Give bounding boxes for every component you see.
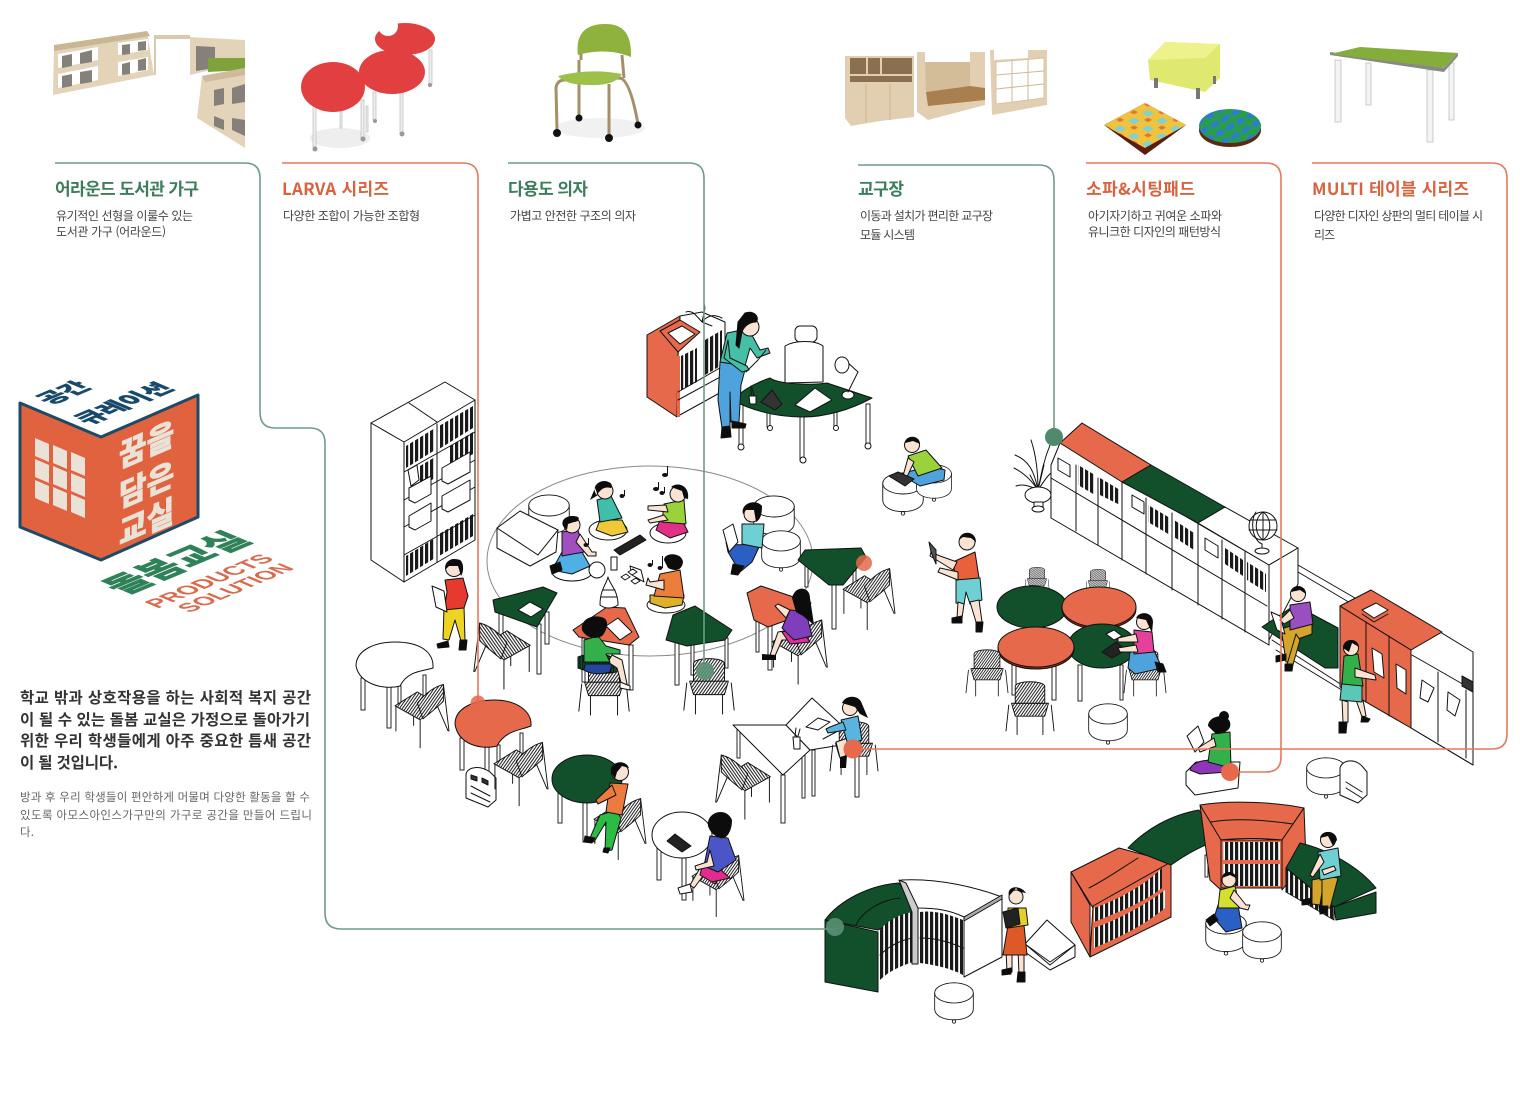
connector line: MULTI: [853, 163, 1507, 749]
person: boy reading with teal shirt: [723, 502, 764, 575]
white kidney table: [356, 642, 433, 728]
chair right of green table: [843, 569, 895, 630]
white tri tables: [733, 698, 860, 823]
chair at green table: [684, 659, 734, 714]
panel: LARVA caption: LARVA 시리즈: [282, 175, 389, 200]
person: seated girl with green shirt: [648, 484, 688, 543]
orange table right of rug: [747, 586, 811, 670]
floor title: 돌봄교실: 돌봄교실: [84, 524, 263, 599]
chair by green table: [594, 799, 646, 860]
title text: 공간 큐레이션: 큐레이션: [62, 377, 183, 428]
person: child in green shirt at orange table: [582, 616, 630, 690]
panel: sofa caption: [1086, 175, 1222, 240]
chair front of cluster: [1006, 682, 1054, 735]
around library unit: green and white: [825, 880, 1002, 992]
product photo: sofa and seating pads: [1104, 42, 1261, 155]
title text: 꿈을 담은 교실: 꿈을: [119, 409, 174, 478]
panel: sofa caption: 소파&시팅패드: [1086, 175, 1195, 200]
person: seated boy with teal shirt: [1302, 832, 1341, 914]
green seat right: [1286, 843, 1376, 920]
icon: xylophone and toys: [589, 535, 646, 608]
cabinet orange top: [1060, 423, 1151, 482]
person: girl with blue shirt at tri table: [826, 697, 868, 768]
long storage cabinet: [1051, 423, 1298, 645]
green table on rug right: [666, 606, 732, 685]
intro text block: 방과 후 우리 학생들이 편안하게 머물며 다양한 활동을 할 수: [20, 789, 310, 805]
icon: plant on cabinet: [686, 304, 722, 326]
green round table: [552, 755, 622, 842]
cube front faces: [20, 395, 198, 560]
icon: desk lamp: [835, 357, 858, 399]
white round table: [652, 812, 712, 900]
product photo: teaching cabinets: [845, 50, 1047, 126]
person: teacher: [718, 312, 770, 438]
cabinet green top: [1122, 465, 1225, 523]
panel: cabinet caption: 교구장: [858, 175, 904, 200]
panel: MULTI caption: MULTI 테이블 시리즈: [1312, 175, 1469, 200]
product photo: MULTI table: [1330, 47, 1458, 142]
teacher storage cabinet: [647, 304, 725, 417]
panel: around library caption: 도서관 가구 (어라운드): [56, 223, 166, 240]
bench and orange cabinet: [1262, 565, 1473, 765]
person: boy with orange shirt and toy plane: [929, 533, 983, 632]
panel: cabinet caption: 이동과 설치가 편리한 교구장: [860, 207, 993, 224]
panel: MULTI caption: [1312, 175, 1483, 243]
chair behind girl: [830, 722, 878, 775]
icon: book on table: [518, 602, 543, 617]
title text: 꿈을 담은 교실: [119, 409, 174, 555]
product photo: LARVA tables: [301, 16, 435, 152]
around library unit: orange top: [1200, 802, 1306, 890]
panel: isometric cube title: [20, 362, 198, 560]
teacher desk and chair: [732, 326, 872, 463]
floor subtitle: products solution: PRODUCTS: [138, 551, 280, 611]
intro text block: 있도록 아모스아인스가구만의 가구로 공간을 만들어 드립니: [20, 807, 312, 823]
panel: around library caption: [55, 175, 199, 240]
chair by white round table: [692, 856, 744, 917]
title text: 공간 큐레이션: 공간: [25, 376, 100, 408]
chair at orange table: [773, 620, 827, 684]
stool and backpack right: [1307, 758, 1367, 803]
stool by cluster: [1089, 704, 1127, 744]
person: seated girl with teal shirt: [589, 481, 628, 540]
person: girl with blue shirt and pink shorts: [678, 812, 736, 894]
rug circle: [487, 466, 813, 656]
icon: globe: [1249, 512, 1277, 554]
chair by tri table: [716, 755, 770, 819]
person: girl with pink shirt: [1118, 613, 1166, 674]
panel: sofa caption: 유니크한 디자인의 패턴방식: [1088, 223, 1221, 240]
intro text block: 이 될 수 있는 돌봄 교실은 가정으로 돌아가기: [20, 708, 310, 730]
person: boy with green shirt at orange cabinet: [1339, 640, 1376, 733]
chair left of cluster: [966, 650, 1008, 696]
connector line: around library: [55, 163, 835, 929]
person: kneeling boy with purple shirt: [550, 516, 596, 581]
square stool bottom: [1025, 920, 1075, 970]
chair by orange table: [494, 742, 548, 806]
tall bookcase: [371, 382, 475, 582]
cabinet white top: [1198, 507, 1298, 565]
icon: music notes: [584, 466, 668, 570]
person: seated girl with orange shirt: [646, 554, 685, 613]
cube window icon: [35, 438, 85, 518]
marker dots: [470, 428, 1239, 936]
panel: chair caption: 가볍고 안전한 구조의 의자: [510, 207, 636, 224]
icon: backpack: [466, 768, 496, 807]
around library unit: orange curve: [1071, 848, 1171, 957]
connector line: LARVA: [282, 163, 478, 703]
icon: desk calendar: [761, 390, 782, 410]
person: kneeling boy with lime shirt: [1206, 872, 1250, 932]
orange kidney table: [455, 700, 531, 785]
person: girl with orange skirt: [1002, 887, 1028, 982]
icon: keyboard: [667, 834, 691, 852]
person: boy with orange shirt and green trousers: [584, 762, 629, 853]
floor subtitle: products solution: SOLUTION: [171, 561, 300, 615]
product photo: multipurpose chair: [553, 24, 645, 142]
connector line: cabinet: [858, 165, 1054, 437]
stool and boy with lime shirt: [883, 437, 951, 515]
orange table on rug: [573, 607, 639, 690]
chair under orange table: [578, 654, 629, 715]
panel: chair caption: [508, 175, 636, 224]
potted plant: [1014, 440, 1056, 512]
square stool and girl with green shirt: [1186, 711, 1240, 795]
around library unit: green arc: [1128, 810, 1219, 865]
chair by green table: [474, 623, 530, 689]
panel: sofa caption: 아기자기하고 귀여운 소파와: [1088, 207, 1222, 224]
panel: chair caption: 다용도 의자: [508, 175, 588, 200]
title text: 꿈을 담은 교실: 교실: [119, 486, 174, 555]
title text: 꿈을 담은 교실: 담은: [119, 449, 174, 518]
stool bottom: [935, 983, 973, 1023]
panel: around library caption: 유기적인 선형을 이룰수 있는: [56, 207, 193, 224]
cube top face: [20, 362, 198, 437]
panel: LARVA caption: [282, 175, 420, 224]
person: boy with purple shirt on bench: [1271, 586, 1313, 671]
product photo: around library furniture: [53, 31, 245, 148]
green table right of rug: [798, 548, 866, 629]
connector line: sofa: [1086, 163, 1281, 772]
icon: pen cup: [749, 396, 756, 404]
icon: open book: [795, 388, 832, 412]
panel: around library caption: 어라운드 도서관 가구: [55, 175, 199, 200]
white soft seats on rug: [497, 495, 800, 571]
panel: MULTI caption: 리즈: [1314, 226, 1335, 243]
panel: LARVA caption: 다양한 조합이 가능한 조합형: [283, 207, 420, 224]
panel: cabinet caption: [858, 175, 993, 243]
green table left of rug: [493, 587, 557, 674]
intro text block: 위한 우리 학생들에게 아주 중요한 틈새 공간: [20, 729, 311, 751]
person: child reading in red shirt: [432, 559, 468, 650]
intro text block: 이 될 것입니다.: [20, 751, 118, 773]
chair right of cluster: [1124, 650, 1166, 696]
four round table cluster: [997, 567, 1136, 701]
panel: MULTI caption: 다양한 디자인 상판의 멀티 테이블 시: [1314, 207, 1483, 224]
panel: cabinet caption: 모듈 시스템: [860, 226, 915, 243]
intro text block: 다.: [20, 824, 34, 840]
connector line: chair: [508, 163, 704, 671]
chair by white table: [395, 684, 449, 748]
stools bottom right: [1206, 913, 1281, 962]
person: girl with purple shirt at table: [762, 589, 814, 660]
intro text block: 학교 밖과 상호작용을 하는 사회적 복지 공간: [20, 686, 311, 708]
intro text block: [20, 686, 312, 840]
